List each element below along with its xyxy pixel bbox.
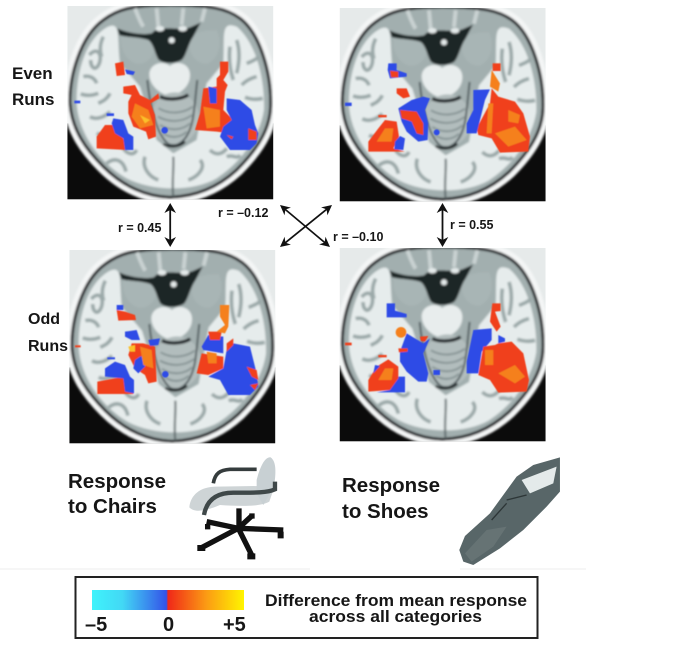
brain scan base — [340, 7, 546, 201]
legend — [76, 577, 538, 638]
icon: shoe — [459, 457, 560, 565]
panel: even runs chairs — [67, 5, 273, 199]
panel: odd runs shoes — [340, 247, 546, 441]
arrow: chairs even to odd — [164, 203, 176, 247]
legend description — [265, 592, 527, 626]
activation map — [75, 305, 258, 395]
activation map — [345, 303, 529, 393]
scale label: minus five: –5 — [85, 614, 107, 636]
panel: even runs shoes — [340, 7, 546, 201]
colour scale — [92, 590, 244, 610]
correlation: chairs: r = 0.45 — [118, 221, 161, 235]
scale label: plus five: +5 — [223, 614, 246, 636]
brain scan base — [69, 249, 275, 443]
heading: response to shoes: Response — [342, 474, 440, 497]
correlation: shoe-chair: r = –0.10 — [333, 230, 383, 244]
correlation: chair-shoe: r = –0.12 — [218, 206, 268, 220]
arrow: cross correlation shoe even to chair odd — [280, 205, 332, 247]
heading: response to chairs: Response — [68, 470, 166, 493]
label: even runs: Runs — [12, 90, 54, 109]
panel: odd runs chairs — [69, 249, 275, 443]
description line one: Difference from mean response — [265, 592, 527, 610]
label: even runs: Even — [12, 64, 53, 83]
label: odd runs: Runs — [28, 338, 68, 355]
arrow: shoes even to odd — [437, 203, 448, 247]
correlation: shoes: r = 0.55 — [450, 218, 493, 232]
brain scan base — [67, 5, 273, 199]
separator line — [0, 568, 586, 570]
description line two: across all categories — [309, 608, 482, 626]
legend frame — [76, 577, 538, 638]
scale label: zero: 0 — [163, 614, 174, 636]
heading: response to chairs: to Chairs — [68, 495, 157, 518]
label: odd runs: Odd — [28, 311, 60, 328]
heading: response to shoes: to Shoes — [342, 500, 429, 523]
arrow: cross correlation chair even to shoe odd — [280, 205, 330, 247]
icon: office chair — [189, 457, 284, 559]
activation map — [345, 63, 530, 153]
brain scan base — [340, 247, 546, 441]
activation map — [74, 62, 258, 150]
